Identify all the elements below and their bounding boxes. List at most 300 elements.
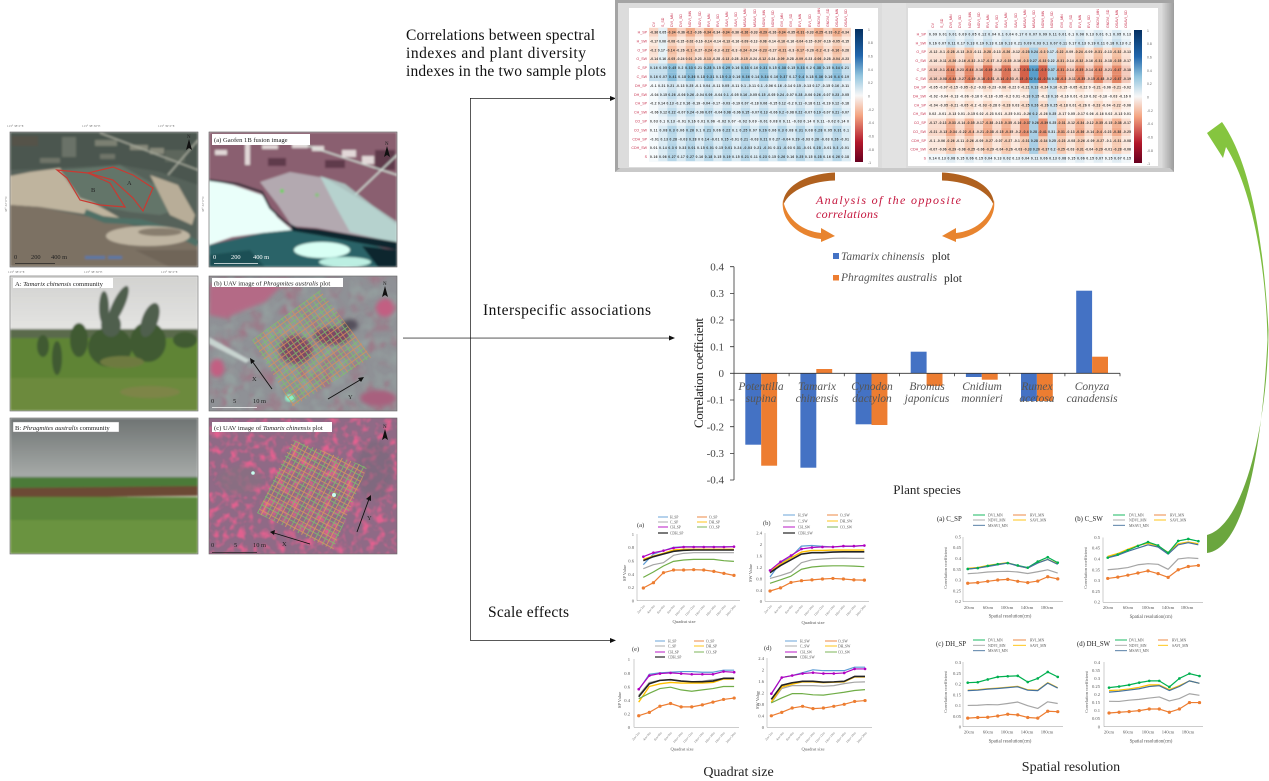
- line chart (b): SW value by quadrat size: 2: [760, 542, 763, 547]
- heatmap: left: DVI_SD: [679, 14, 683, 27]
- line chart: (a) C_SP by spatial resolution: 180cm: [1041, 605, 1054, 610]
- heatmap: right: CDH_SP: [911, 139, 927, 143]
- line chart: (b) C_SW by spatial resolution: [1075, 514, 1203, 620]
- line chart: (d) DH_SW by spatial resolution: NDVI_MN: [1129, 644, 1147, 648]
- map panel: study area satellite image: N: [187, 135, 191, 140]
- line chart: (b) C_SW by spatial resolution: (b) C_SW: [1075, 516, 1103, 523]
- line chart (a): SP value by quadrat size: 0.2: [628, 585, 635, 590]
- line chart: (c) DH_SP by spatial resolution: 0.1: [955, 703, 962, 708]
- photo B: Phragmites australis community: [10, 418, 198, 554]
- panel (b): UAV image of Phragmites australis plot: 0: [211, 398, 214, 405]
- caption: spatial resolution: Spatial resolution: [1022, 760, 1120, 775]
- line chart: (d) DH_SW by spatial resolution: 0.3: [1094, 676, 1101, 681]
- line chart: (a) C_SP by spatial resolution: 60cm: [983, 605, 994, 610]
- plot outline A: [88, 167, 153, 211]
- label: Tamarix plot: [212, 422, 332, 432]
- line chart: (d) DH_SW by spatial resolution: 0.15: [1092, 700, 1101, 705]
- line chart (b): SW value by quadrat size: O_SW: [840, 514, 850, 518]
- line chart (d): SW value by quadrat size: 2: [762, 668, 765, 672]
- line chart: (d) DH_SW by spatial resolution: DVI_MN: [1129, 638, 1144, 642]
- heatmap: right: -0.4: [1147, 122, 1153, 126]
- line chart (d): SW value by quadrat size: DH_SW: [838, 644, 851, 648]
- bar chart: correlation coefficient by plant species: 0.1: [710, 341, 724, 353]
- line chart (b): SW value by quadrat size: 4m×4m: [773, 604, 783, 615]
- line chart: (a) C_SP by spatial resolution: 0.2: [955, 599, 962, 604]
- panel (c): UAV image of Tamarix chinensis plot: [209, 418, 397, 554]
- line chart (a): SP value by quadrat size: 0.6: [628, 558, 635, 564]
- line chart (c): SP value by quadrat size: (e): [632, 646, 639, 653]
- line chart: (d) DH_SW by spatial resolution: 100cm: [1142, 730, 1155, 734]
- line chart (d): SW value by quadrat size: 0: [762, 725, 765, 730]
- heatmap: left: RVI_MN: [707, 13, 711, 27]
- line chart (b): SW value by quadrat size: 8m×8m: [794, 604, 804, 615]
- label: Tamarix plot: (c) UAV image of Tamarix chinensis plot: [214, 425, 323, 432]
- heatmap: left: SAVI_MN: [725, 11, 729, 27]
- line chart: (b) C_SW by spatial resolution: Correlation coefficient: [1083, 546, 1088, 589]
- map panel: study area satellite image: 113° 38' 0"E: [7, 124, 24, 128]
- line chart (d): SW value by quadrat size: 8m×8m: [795, 731, 805, 742]
- heading: correlations: [406, 27, 606, 80]
- line chart: (c) DH_SP by spatial resolution: Spatial resolution(cm): [989, 740, 1032, 744]
- heatmap: left: MSAVI_MN: [743, 8, 747, 27]
- line chart: (d) DH_SW by spatial resolution: 180cm: [1182, 730, 1195, 734]
- line chart: (d) DH_SW by spatial resolution: (d) DH_SW: [1077, 641, 1111, 648]
- label: Gaofen image: [212, 134, 310, 145]
- line chart (a): SP value by quadrat size: Quadrat size: [672, 619, 696, 624]
- line chart (d): SW value by quadrat size: 10m×10m: [804, 731, 816, 744]
- plot outline B: [57, 170, 125, 207]
- map panel: study area satellite image: 113° 39' 0"E: [161, 270, 178, 274]
- heatmap: left: S_SD: [661, 17, 665, 27]
- heatmap: right: MSAVI_MN: [1023, 9, 1027, 28]
- line chart (a): SP value by quadrat size: 10m×10m: [674, 604, 686, 617]
- heatmap: right: CV: [931, 22, 935, 28]
- line chart: (b) C_SW by spatial resolution: 0.5: [1094, 535, 1101, 540]
- heatmap: left: CDH_SW: [631, 146, 648, 150]
- line chart (d): SW value by quadrat size: 2m×2m: [764, 731, 774, 742]
- axes: [730, 267, 1120, 480]
- arrow X: [270, 530, 310, 544]
- line chart (d): SW value by quadrat size: 0.4: [758, 714, 765, 718]
- panel (a): Gaofen 1B fusion image: 200: [231, 254, 241, 261]
- heatmap: left: 0.16 0.06 0.27 0.17 0.27 0.16 0.18 0.15 0.19 0.15 0.21 0.11 0.23 0.15 0.26 0.16 0.25 0.15 0.28 0.16 0.26 0.18: [650, 155, 849, 159]
- heatmap: left: OSAVI_MN: [835, 8, 839, 27]
- heatmap: right: 1: [1147, 29, 1149, 33]
- label: community A: [13, 278, 113, 288]
- heatmap: right: -0.07 -0.06 -0.29 -0.08 -0.25 -0.06 -0.29 -0.04 -0.26 -0.03 -0.33 0.26 -0.37 0.2 -0.25 -0.03 -0.31 -0.04 -0.29 -0.01 -0.28 -0.06: [929, 148, 1131, 152]
- heatmap: left: 0.16 0.05 0.45 0.2 0.33 0.21 0.28 0.15 0.29 0.16 0.33 0.16 0.31 0.15 0.38 0.15 0.33 0.2 0.38 0.15 0.34 0.21: [650, 66, 849, 70]
- line chart: (a) C_SP by spatial resolution: 0.3: [955, 578, 962, 582]
- heatmap: right: NDWI_SD: [1050, 11, 1054, 28]
- line chart (c): SP value by quadrat size: C_SP: [668, 644, 676, 648]
- heatmap: left: -0.2: [868, 108, 874, 112]
- line chart (a): SP value by quadrat size: SP Value: [622, 565, 627, 581]
- heatmap: left: S: [645, 155, 648, 159]
- line chart (b): SW value by quadrat size: 0.4: [756, 588, 763, 593]
- heading: correlations: Correlations between spectral: [406, 27, 595, 44]
- line chart: (a) C_SP by spatial resolution: MSAVI_MN: [988, 524, 1008, 528]
- legend: plot: [932, 251, 951, 263]
- heatmap: left: C_SW: [637, 75, 648, 79]
- line chart (a): SP value by quadrat size: CH_SP: [670, 526, 681, 530]
- text: analysis of the opposite correlations: [815, 193, 962, 221]
- heatmap: left: -0.8: [868, 148, 874, 152]
- heatmap: right: NDVI_MN: [968, 11, 972, 28]
- heatmap: right: RVI_MN: [986, 14, 990, 28]
- heatmap: right: O_SW: [915, 59, 927, 63]
- bar chart: correlation coefficient by plant species: Correlation coefficient: [691, 318, 706, 428]
- line chart: (b) C_SW by spatial resolution: 0.4: [1094, 556, 1101, 562]
- panel (b): UAV image of Phragmites australis plot: 5: [233, 398, 236, 405]
- line chart (a): SP value by quadrat size: 20m×20m: [725, 604, 737, 617]
- line chart (b): SW value by quadrat size: CH_SW: [798, 526, 811, 530]
- bar chart: correlation coefficient by plant species: -0.3: [707, 448, 724, 460]
- line chart: (d) DH_SW by spatial resolution: 0.35: [1092, 668, 1101, 673]
- heatmap: right: S: [924, 156, 927, 160]
- legend: Phragmites australis: [840, 272, 938, 284]
- line chart (c): SP value by quadrat size: [617, 640, 739, 752]
- heatmap: right: -0.16 -0.11 -0.26 -0.16 -0.32 -0.17 -0.37 -0.2 -0.35 -0.16 -0.3 0.27 -0.33 0.22 -0.31 -0.14 -0.32 -0.16 -0.31 -0.18 -0.35 -0.17: [929, 59, 1131, 63]
- map panel: study area satellite image: 400 m: [51, 254, 67, 261]
- heading: correlations: indexes in the two sample plots: [406, 63, 606, 80]
- line chart (b): SW value by quadrat size: 6m×6m: [784, 604, 794, 615]
- map panel: study area satellite image: A: [127, 180, 132, 187]
- line chart (d): SW value by quadrat size: 12m×12m: [814, 731, 826, 744]
- heatmap: right: [908, 8, 1158, 166]
- line chart: (c) DH_SP by spatial resolution: SAVI_MN: [1030, 644, 1047, 648]
- line chart: (b) C_SW by spatial resolution: 20cm: [1103, 605, 1114, 610]
- panel (a): Gaofen 1B fusion image: N: [385, 142, 389, 147]
- curved arrows: analysis of opposite correlations: [783, 172, 994, 242]
- heatmap: right: GNDVI_MN: [1096, 9, 1100, 28]
- panel (b): UAV image of Phragmites australis plot: X: [252, 376, 257, 383]
- line chart (b): SW value by quadrat size: 18m×18m: [845, 604, 857, 617]
- line chart (c): SP value by quadrat size: 0.8: [624, 671, 631, 676]
- heatmap: right: -0.21 -0.13 -0.34 -0.22 -0.4 -0.21 -0.38 -0.15 -0.35 -0.2 -0.4 0.28 -0.41 0.31 -0.31 -0.13 -0.36 -0.14 -0.4 -0.23 -0.38 -0.25: [929, 130, 1131, 134]
- line chart: (a) C_SP by spatial resolution: Correlation coefficient: [943, 546, 948, 589]
- line chart: (a) C_SP by spatial resolution: 100cm: [1001, 605, 1014, 610]
- line chart (b): SW value by quadrat size: 1.6: [756, 554, 763, 558]
- heatmap: right: -0.02 -0.04 -0.13 -0.06 -0.16 0 -0.18 -0.05 -0.2 0.01 -0.18 0.15 -0.18 0.16 -0.16 0.01 -0.19 0.02 -0.16 -0.03 -0.16 0: [929, 94, 1131, 98]
- heatmap: left: CH_SP: [635, 102, 648, 106]
- line chart (b): SW value by quadrat size: DH_SW: [840, 520, 853, 524]
- line chart (d): SW value by quadrat size: (d): [764, 645, 772, 652]
- line chart (c): SP value by quadrat size: CO_SP: [706, 650, 717, 654]
- line chart: (d) DH_SW by spatial resolution: 0.05: [1092, 716, 1101, 721]
- line chart: (c) DH_SP by spatial resolution: RVI_MN: [1030, 638, 1045, 642]
- line chart (d): SW value by quadrat size: Quadrat size: [801, 746, 825, 752]
- heatmap: left: CO_SW: [634, 128, 648, 132]
- heatmap: right: -0.17 -0.13 -0.33 -0.14 -0.35 -0.17 -0.38 -0.15 -0.35 -0.16 -0.37 0.26 -0.39 0.25 -0.31 -0.12 -0.34 -0.12 -0.35 -0.15 -0.38 -0.17: [929, 121, 1131, 125]
- bars: [745, 291, 1108, 468]
- sampling grid: [252, 290, 372, 407]
- heatmap: left: H_SW: [637, 39, 648, 43]
- bar chart: correlation coefficient by plant species: 0.3: [710, 288, 724, 300]
- heatmap: right: -0.05 -0.07 -0.15 -0.05 -0.2 -0.03 -0.23 -0.06 -0.22 0 -0.21 0.13 -0.24 0.16 -0.15 -0.05 -0.22 0 -0.21 -0.06 -0.21 -0.02: [929, 86, 1131, 90]
- bar chart: correlation coefficient by plant species: -0.2: [707, 421, 724, 433]
- line chart: (c) DH_SP by spatial resolution: 0.25: [953, 671, 962, 676]
- bar chart: correlation coefficient by plant species: 0.4: [710, 262, 724, 274]
- heatmap: left: -0.1 0.21 0.21 -0.13 0.25 -0.1 0.04 -0.11 0.05 -0.11 0.1 -0.11 0.1 -0.06 0.16 -0.14 0.15 -0.13 0.17 -0.15 0.16 -0.11: [650, 84, 849, 88]
- line chart (d): SW value by quadrat size: 6m×6m: [785, 731, 795, 742]
- line chart (b): SW value by quadrat size: 2m×2m: [763, 604, 773, 615]
- heatmap: left: EVI_SD: [808, 14, 812, 27]
- line chart (b): SW value by quadrat size: 16m×16m: [834, 604, 846, 617]
- line chart (a): SP value by quadrat size: CDH_SP: [670, 532, 683, 536]
- line chart: (a) C_SP by spatial resolution: 0.4: [955, 556, 962, 561]
- line chart: (c) DH_SP by spatial resolution: 20cm: [964, 730, 975, 734]
- heatmap: left: 0.16 0.07 0.41 0.18 0.36 0.18 0.31 0.15 0.3 0.16 0.36 0.14 0.34 0.16 0.37 0.17 0.4 0.18 0.36 0.16 0.4 0.19: [650, 75, 849, 79]
- panel (c): UAV image of Tamarix chinensis plot: 5: [234, 542, 237, 549]
- heatmap: right: DH_SW: [913, 94, 927, 98]
- heatmap: left: CDH_SP: [632, 137, 648, 141]
- line chart (c): SP value by quadrat size: 20m×20m: [725, 731, 737, 744]
- legend: [833, 251, 963, 285]
- panel (c): UAV image of Tamarix chinensis plot: N: [383, 425, 387, 430]
- legend: plot: [944, 273, 963, 285]
- line chart: (d) DH_SW by spatial resolution: 60cm: [1123, 730, 1134, 734]
- heatmap: left: NDVI_SD: [698, 11, 702, 27]
- line chart (a): SP value by quadrat size: 16m×16m: [705, 604, 717, 617]
- line chart (a): SP value by quadrat size: 0.8: [628, 545, 635, 550]
- line chart (c): SP value by quadrat size: 0.2: [624, 712, 631, 716]
- bar chart: correlation coefficient by plant species: Cnidium: [962, 381, 1002, 393]
- line chart (a): SP value by quadrat size: 2m×2m: [636, 604, 646, 615]
- line chart (d): SW value by quadrat size: C_SW: [800, 644, 810, 648]
- line chart (a): SP value by quadrat size: 4m×4m: [646, 604, 656, 615]
- line chart: (c) DH_SP by spatial resolution: [936, 638, 1063, 744]
- text: analysis of the opposite correlations: Analysis of the opposite: [815, 193, 962, 207]
- line chart (c): SP value by quadrat size: 1: [628, 657, 631, 662]
- text: analysis of the opposite correlations: correlations: [816, 207, 878, 221]
- line chart: (b) C_SW by spatial resolution: 100cm: [1142, 605, 1155, 610]
- label: Phragmites plot: [212, 278, 343, 288]
- line chart (a): SP value by quadrat size: CO_SP: [709, 526, 720, 530]
- heatmap: left: [629, 8, 878, 167]
- heatmap: right: OSAVI_MN: [1115, 9, 1119, 28]
- heatmap: right: C_SW: [916, 77, 927, 81]
- line chart: (a) C_SP by spatial resolution: 0.45: [953, 545, 962, 550]
- line chart: (c) DH_SP by spatial resolution: 180cm: [1041, 730, 1054, 734]
- panel (a): Gaofen 1B fusion image: [209, 132, 397, 267]
- heatmap: right: CDH_SW: [910, 148, 927, 152]
- heatmap: right: OSAVI_SD: [1124, 10, 1128, 28]
- line chart (b): SW value by quadrat size: (b): [763, 520, 771, 527]
- line chart: (d) DH_SW by spatial resolution: Correlation coefficient: [1084, 670, 1089, 713]
- line chart (c): SP value by quadrat size: H_SP: [668, 640, 676, 644]
- line chart (b): SW value by quadrat size: 20m×20m: [855, 604, 867, 617]
- heatmap: left: -0.36 0.05 -0.34 -0.36 -0.2 -0.36 -0.34 -0.34 -0.34 -0.36 -0.26 -0.33 -0.29 -0.26 -0.34 -0.35 -0.31 -0.33 -0.25 -0.33 -0.2 -0.34: [650, 30, 849, 34]
- line chart: (c) DH_SP by spatial resolution: (c) DH_SP: [936, 641, 966, 648]
- heatmap: right: -1: [1147, 162, 1150, 166]
- heatmap: left: H_SP: [638, 30, 648, 34]
- map panel: study area satellite image: 38° 32' 0"N: [4, 196, 8, 212]
- heatmap: left: 0.2: [868, 81, 873, 85]
- line chart: (c) DH_SP by spatial resolution: 0: [959, 724, 962, 730]
- line chart: (a) C_SP by spatial resolution: SAVI_MN: [1030, 518, 1047, 522]
- heatmap: left: NDWI_MN: [762, 9, 766, 27]
- panel (c): UAV image of Tamarix chinensis plot: 0: [211, 542, 214, 549]
- line chart (a): SP value by quadrat size: H_SP: [670, 516, 678, 520]
- heatmap: left: RVI_SD: [716, 14, 720, 27]
- line chart (c): SP value by quadrat size: O_SP: [706, 640, 714, 644]
- heatmap: right: 0.14 0.13 0.08 0.15 0.06 0.15 0.04 0.13 0.02 0.13 0.04 0.11 0.06 0.13 0.08 0.15 0.06 0.15 0.07 0.15 0.07 0.15: [929, 156, 1131, 160]
- line chart: (b) C_SW by spatial resolution: 0.25: [1092, 589, 1101, 594]
- bar chart: correlation coefficient by plant species: Rumex: [1020, 381, 1054, 393]
- line chart: (d) DH_SW by spatial resolution: 140cm: [1162, 730, 1175, 734]
- heatmap: right: GNDVI_SD: [1106, 9, 1110, 28]
- heatmap: right: NDVI_SD: [977, 12, 981, 28]
- line chart (d): SW value by quadrat size: 4m×4m: [775, 731, 785, 742]
- panel (a): Gaofen 1B fusion image: 0: [213, 254, 216, 261]
- line chart (b): SW value by quadrat size: CO_SW: [840, 526, 853, 530]
- heatmap: right: 0.4: [1147, 69, 1152, 73]
- line chart: (c) DH_SP by spatial resolution: 0.05: [953, 714, 962, 719]
- heatmap: right: NDWI_MN: [1041, 10, 1045, 28]
- heatmap: right: 0.6: [1147, 56, 1152, 60]
- heatmap: right: -0.04 -0.05 -0.21 -0.05 -0.2 -0.03 -0.28 0 -0.28 0.03 -0.25 0.26 -0.26 0.25 -0.18 0.01 -0.26 0 -0.23 -0.04 -0.22 -0.06: [929, 103, 1131, 107]
- line chart (d): SW value by quadrat size: CH_SW: [800, 650, 813, 654]
- line chart (d): SW value by quadrat size: [755, 640, 872, 752]
- heatmap: right: H_SW: [916, 41, 927, 45]
- label: Phragmites plot: (b) UAV image of Phragmites australis plot: [214, 280, 330, 288]
- heatmap: left: NDVI_MN: [688, 10, 692, 27]
- line chart (b): SW value by quadrat size: 12m×12m: [813, 604, 825, 617]
- map panel: study area satellite image: 113° 38' 30"E: [84, 270, 102, 274]
- line chart: (d) DH_SW by spatial resolution: SAVI_MN: [1172, 644, 1189, 648]
- label: community B: [13, 422, 119, 432]
- heading: scale effects: Scale effects: [488, 604, 569, 621]
- heatmap: right: SAVI_MN: [1004, 12, 1008, 28]
- panel (b): UAV image of Phragmites australis plot: 10 m: [253, 398, 266, 405]
- heatmap: right: -0.16 -0.08 -0.44 -0.27 -0.49 -0.16 -0.51 -0.14 -0.53 -0.15 -0.52 0.44 -0.54 0.38 -0.3 -0.11 -0.35 -0.15 -0.48 -0.2 -0.47 -0.19: [929, 77, 1131, 81]
- line chart (a): SP value by quadrat size: 8m×8m: [666, 604, 676, 615]
- heatmap: right: DH_SP: [914, 86, 927, 90]
- line chart: (b) C_SW by spatial resolution: 60cm: [1123, 605, 1134, 610]
- green feedback arrow: [1207, 122, 1268, 553]
- line chart: (c) DH_SP by spatial resolution: 0.3: [955, 660, 962, 665]
- line chart: (c) DH_SP by spatial resolution: MSAVI_MN: [988, 649, 1008, 653]
- line chart (d): SW value by quadrat size: 16m×16m: [835, 731, 847, 744]
- sampling grid: [257, 440, 367, 550]
- line chart: (a) C_SP by spatial resolution: DVI_MN: [988, 514, 1003, 518]
- line chart (b): SW value by quadrat size: C_SW: [798, 520, 808, 524]
- heatmap: right: -0.8: [1147, 149, 1153, 153]
- heatmap: right: O_SP: [916, 50, 927, 54]
- line chart (d): SW value by quadrat size: H_SW: [800, 640, 810, 644]
- map panel: study area satellite image: 113° 38' 30"E: [82, 124, 100, 128]
- heatmap: left: -0.14 0.16 -0.05 -0.24 0.01 -0.23 -0.13 -0.28 -0.13 -0.28 -0.15 -0.24 -0.12 -0.24 -0.09 -0.28 -0.09 -0.23 -0.06 -0.28 -0.04 -0.23: [650, 57, 849, 61]
- line chart (a): SP value by quadrat size: (a): [637, 522, 644, 529]
- heatmap: left: GNDVI_MN: [817, 8, 821, 27]
- line chart: (b) C_SW by spatial resolution: Spatial resolution(cm): [1130, 615, 1173, 620]
- line chart: (c) DH_SP by spatial resolution: 60cm: [983, 730, 994, 734]
- bar chart: correlation coefficient by plant species: japonicus: [903, 393, 950, 405]
- line chart: (b) C_SW by spatial resolution: 0.35: [1092, 568, 1101, 572]
- bar chart: correlation coefficient by plant species: [691, 251, 1120, 497]
- line chart: (b) C_SW by spatial resolution: RVI_MN: [1170, 514, 1185, 518]
- line chart (c): SP value by quadrat size: 14m×14m: [693, 731, 705, 744]
- map panel: study area satellite image: 38° 32' 0"N: [201, 196, 205, 212]
- heatmap: right: CO_SP: [914, 121, 927, 125]
- heatmap: left: DH_SP: [635, 84, 648, 88]
- line chart: (a) C_SP by spatial resolution: (a) C_SP: [937, 516, 962, 523]
- photo A: Tamarix chinensis community: [10, 276, 198, 411]
- heatmap: left: 0.6: [868, 54, 873, 58]
- line chart: (d) DH_SW by spatial resolution: 0.4: [1094, 660, 1101, 665]
- line chart (c): SP value by quadrat size: SP Value: [617, 692, 622, 708]
- line chart: (a) C_SP by spatial resolution: Spatial resolution(cm): [989, 614, 1032, 620]
- bar chart: correlation coefficient by plant species: Bromus: [909, 381, 945, 393]
- heatmap: right: GVI_MN: [1060, 14, 1064, 28]
- heatmap: right: CH_SW: [913, 112, 927, 116]
- line chart: (d) DH_SW by spatial resolution: RVI_MN: [1172, 638, 1187, 642]
- map panel: study area satellite image: 0: [14, 254, 17, 261]
- label: community B: B: Phragmites australis community: [15, 425, 110, 432]
- heatmap: left: GVI_SD: [789, 13, 793, 27]
- heatmap: right: 0.2: [1147, 82, 1152, 86]
- line chart (d): SW value by quadrat size: 2.4: [758, 656, 765, 661]
- bar chart: correlation coefficient by plant species: canadensis: [1066, 393, 1118, 405]
- heatmap: left: -0.17 0.06 -0.08 -0.15 -0.02 -0.16 -0.14 -0.14 -0.13 -0.16 -0.09 -0.13 -0.08 -0.14 -0.16 -0.16 -0.04 -0.15 -0.07 -0.16 -0.05 -0.15: [650, 39, 849, 43]
- panel (c): UAV image of Tamarix chinensis plot: X: [282, 541, 287, 548]
- line chart (a): SP value by quadrat size: 6m×6m: [656, 604, 666, 615]
- panel (b): UAV image of Phragmites australis plot: [209, 276, 397, 411]
- legend: Tamarix chinensis: [841, 251, 925, 263]
- line chart (a): SP value by quadrat size: C_SP: [670, 520, 678, 524]
- line chart (a): SP value by quadrat size: 0.4: [628, 572, 635, 577]
- panel (b): UAV image of Phragmites australis plot: Y: [348, 394, 353, 401]
- heatmap: left: -0.06 0.12 0.22 -0.07 0.24 -0.06 0.07 -0.04 0.08 -0.06 0.15 -0.07 0.13 -0.06 0.2 -0.08 0.22 -0.07 0.19 -0.07 0.21 -0.07: [650, 111, 849, 115]
- bar chart: correlation coefficient by plant species: acetosa: [1019, 393, 1055, 405]
- line chart: (b) C_SW by spatial resolution: NDVI_MN: [1129, 518, 1147, 522]
- line chart: (c) DH_SP by spatial resolution: 100cm: [1001, 730, 1014, 734]
- panel (a): Gaofen 1B fusion image: 400 m: [253, 254, 269, 261]
- line chart (c): SP value by quadrat size: CDH_SP: [668, 656, 681, 660]
- bar chart: correlation coefficient by plant species: chinensis: [796, 393, 839, 405]
- line chart (b): SW value by quadrat size: CDH_SW: [798, 532, 813, 536]
- line chart: (a) C_SP by spatial resolution: RVI_MN: [1030, 514, 1045, 518]
- line chart (c): SP value by quadrat size: 0.4: [624, 698, 631, 703]
- line chart (a): SP value by quadrat size: [622, 516, 740, 624]
- line chart: (c) DH_SP by spatial resolution: 140cm: [1021, 730, 1034, 734]
- caption: quadrat size: Quadrat size: [703, 765, 774, 780]
- bar chart: correlation coefficient by plant species: Conyza: [1075, 381, 1110, 393]
- line chart: (b) C_SW by spatial resolution: 0.45: [1092, 546, 1101, 550]
- label: Gaofen image: (a) Gaofen 1B fusion image: [214, 137, 288, 144]
- bar chart: correlation coefficient by plant species: Potentilla: [737, 381, 784, 393]
- line chart (a): SP value by quadrat size: 1: [632, 532, 635, 537]
- line chart: (b) C_SW by spatial resolution: 0.3: [1094, 578, 1101, 583]
- heatmap: right: DVI_MN: [949, 14, 953, 28]
- heatmap: right: DVI_SD: [958, 15, 962, 28]
- bar chart: correlation coefficient by plant species: Tamarix: [798, 381, 837, 393]
- panel (b): UAV image of Phragmites australis plot: N: [383, 282, 387, 287]
- arrow Y: [328, 377, 364, 399]
- line chart (b): SW value by quadrat size: Quadrat size: [801, 620, 825, 625]
- line chart: (a) C_SP by spatial resolution: 140cm: [1021, 605, 1034, 610]
- line chart (a): SP value by quadrat size: O_SP: [709, 516, 717, 520]
- label: community A: A: Tamarix chinensis community: [15, 281, 104, 288]
- heatmap: left: DVI_MN: [670, 13, 674, 27]
- heatmap: right: 0.02 -0.01 -0.13 0.01 -0.15 0.02 -0.23 0.01 -0.25 0.01 -0.26 0.2 -0.26 0.25 -0.17 0.05 -0.17 0.06 -0.16 0.02 -0.13 0.01: [929, 112, 1131, 116]
- arrow Y: [357, 495, 371, 532]
- line chart (b): SW value by quadrat size: 2.4: [756, 530, 763, 536]
- heatmap: left: SAVI_SD: [734, 12, 738, 27]
- map panel: study area satellite image: 113° 38' 0"E: [8, 270, 25, 274]
- heatmap: right: 0.16 0.07 0.11 0.17 0.13 0.19 0.13 0.18 0.13 0.21 0.09 0.03 0.1 0.07 0.11 0.17 0.13 0.19 0.11 0.18 0.13 0.2: [929, 41, 1131, 45]
- line chart (a): SP value by quadrat size: 0: [632, 598, 635, 604]
